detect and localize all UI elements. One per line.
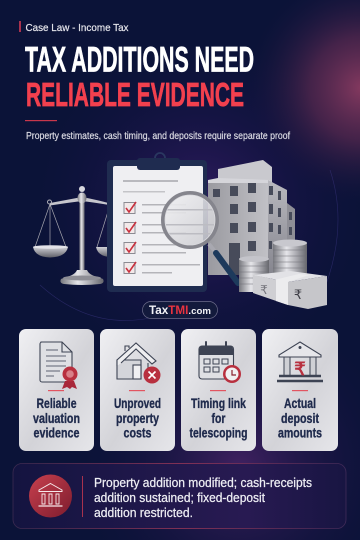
accent divider	[48, 390, 64, 391]
icon: rupee cash bundle	[253, 271, 327, 309]
side windows	[269, 186, 292, 249]
card: unproved property costs	[100, 329, 175, 451]
left face	[253, 275, 288, 305]
rupee symbols: ₹	[260, 283, 268, 297]
icon: certificate document	[40, 342, 78, 389]
panel: outcome summary	[13, 464, 346, 528]
icon: rupee cash bundle: ₹	[294, 287, 302, 302]
paper	[113, 166, 203, 286]
card label: for	[212, 410, 226, 426]
card label	[33, 395, 80, 440]
accent divider	[292, 390, 308, 391]
checklist rows	[124, 202, 200, 274]
front windows	[213, 183, 256, 275]
logo text: TaxTMI.com	[149, 305, 211, 317]
accent divider	[129, 390, 145, 391]
heading lines	[123, 180, 178, 182]
rear stack	[273, 243, 307, 274]
header	[19, 21, 290, 142]
icon: building	[208, 160, 295, 275]
icon: bank with rupee: ₹	[294, 359, 306, 379]
side face	[268, 180, 287, 275]
base	[60, 270, 104, 285]
roof block	[218, 160, 272, 185]
card label	[190, 395, 248, 440]
eyebrow text: Case Law - Income Tax	[26, 22, 129, 34]
vertical divider	[82, 476, 83, 517]
paper band	[276, 274, 309, 305]
lens	[164, 194, 216, 246]
outcome text: Property addition modified; cash-receipts	[94, 475, 312, 490]
title line two: RELIABLE EVIDENCE	[26, 76, 244, 113]
card label: telescoping	[190, 424, 248, 440]
icon: court building badge	[29, 474, 72, 518]
icon: coin stacks	[239, 240, 307, 292]
outcome text: addition sustained; fixed-deposit	[94, 490, 265, 505]
logo pill	[142, 302, 218, 318]
title underline	[25, 120, 57, 121]
card label: Timing link	[191, 395, 246, 411]
card label: evidence	[34, 424, 80, 440]
accent divider	[210, 390, 226, 391]
card label: deposit	[281, 410, 319, 426]
icon: scales of justice	[33, 186, 112, 285]
icon: clipboard checklist	[107, 153, 207, 292]
icon: house with cross	[117, 343, 160, 384]
front stack	[239, 259, 269, 292]
beam	[50, 197, 112, 206]
outcome text	[94, 475, 312, 520]
eyebrow accent bar	[19, 21, 21, 32]
top face	[253, 271, 327, 282]
front face	[208, 180, 270, 275]
card: timing link for telescoping	[181, 329, 256, 451]
card label	[278, 395, 322, 440]
card label: property	[116, 410, 159, 426]
card: actual deposit amounts	[262, 329, 338, 451]
card label: Reliable	[36, 395, 77, 411]
handle	[209, 244, 217, 254]
pillar	[80, 197, 84, 275]
outcome text: addition restricted.	[94, 505, 193, 520]
card label	[114, 395, 161, 440]
left pan	[33, 247, 68, 258]
clipboard board	[107, 160, 207, 292]
subtitle: Property estimates, cash timing, and deposits require separate proof	[26, 130, 290, 142]
icon: calendar with clock	[199, 342, 241, 383]
card label: valuation	[33, 410, 80, 426]
card label: amounts	[278, 424, 322, 440]
card label: Unproved	[114, 395, 161, 411]
rear wing	[287, 203, 295, 265]
rim	[163, 193, 217, 247]
card: reliable valuation evidence	[19, 329, 94, 451]
card label: costs	[124, 424, 152, 440]
right face	[288, 276, 327, 309]
decorative floor arcs	[40, 170, 338, 321]
right pan	[96, 247, 112, 257]
icon: magnifying glass	[163, 193, 238, 283]
clip	[155, 153, 165, 158]
card label: Actual	[284, 395, 316, 411]
left pan strings	[35, 204, 110, 247]
